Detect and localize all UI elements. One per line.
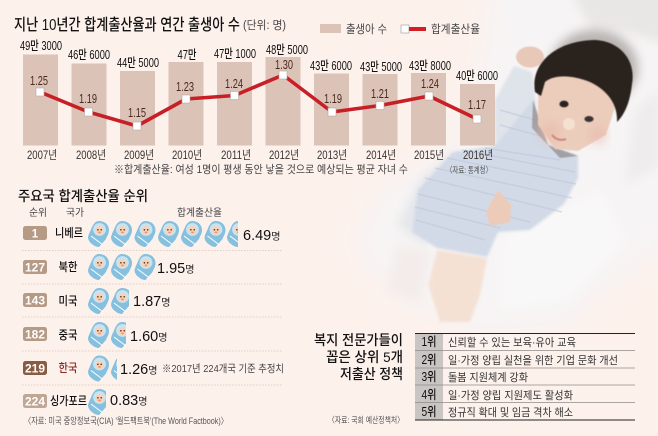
year labels: 2013년 [317, 148, 347, 162]
row: South Korea: 한국 [58, 361, 78, 375]
table: top five policies: 돌봄 지원체계 강화 [448, 371, 528, 384]
bar chart: births and total fertility rate [20, 39, 498, 162]
source: National Assembly Budget Office: 〈자료: 국회 예산정책처〉 [328, 415, 404, 425]
table: top five policies: 3위 [422, 370, 436, 384]
row: North Korea: 127 [25, 262, 45, 274]
hair [534, 40, 633, 122]
heading: top five policies [314, 332, 403, 382]
photo: baby lying on white bedding [350, 0, 658, 335]
legs [428, 250, 487, 322]
birth count labels: 49만 3000 [20, 39, 62, 53]
row: South Korea [23, 356, 284, 382]
row: USA: 미국 [58, 294, 78, 308]
year labels: 2016년 [463, 148, 493, 162]
heading: top five policies: 꼽은 상위 5개 [326, 349, 403, 365]
rate labels: 1.19 [324, 92, 342, 106]
rate labels: 1.19 [79, 92, 97, 106]
row: South Korea: ※2017년 224개국 기준 추정치 [162, 363, 284, 375]
row: Singapore [23, 389, 147, 415]
lower hand [486, 190, 511, 226]
rank labels: 1위 [422, 335, 436, 349]
eyes [559, 101, 569, 107]
row: Singapore: 0.83명 [110, 393, 147, 409]
birth count labels: 43만 8000 [409, 59, 451, 73]
rate labels: 1.21 [371, 87, 389, 101]
birth count labels: 40만 6000 [456, 69, 498, 83]
birth count labels: 47만 [178, 48, 197, 62]
row: North Korea: 북한 [58, 260, 78, 274]
legend: 합계출산율 [431, 23, 480, 36]
year labels: 2010년 [172, 148, 202, 162]
bars [23, 54, 495, 146]
year labels: 2009년 [124, 148, 154, 162]
bodysuit [412, 100, 578, 257]
rate labels: 1.24 [421, 77, 439, 91]
raised arm [495, 66, 536, 150]
rate labels: 1.15 [128, 106, 146, 120]
rate labels: 1.25 [30, 74, 48, 88]
row: Niger: 니베르 [55, 226, 83, 240]
row: China: 1.60명 [130, 329, 167, 345]
unit note: (단위: 명) [243, 19, 286, 32]
year labels [27, 148, 493, 162]
table: top five policies: 일·가정 양립 지원제도 활성화 [448, 388, 573, 402]
birth count labels: 43만 6000 [310, 59, 352, 73]
row: China: 중국 [58, 328, 78, 342]
birth count labels: 46만 6000 [68, 48, 110, 62]
heading: top five policies: 저출산 정책 [340, 366, 403, 382]
row: Singapore: 싱가포르 [50, 394, 87, 408]
legend: 출생아 수 [346, 23, 387, 36]
year labels: 2012년 [269, 148, 299, 162]
footnote: definition: ※합계출산율: 여성 1명이 평생 동안 낳을 것으로 예상되는 평균 자녀 수 [114, 163, 408, 176]
source: CIA World Factbook: 〈자료: 미국 중앙정보국(CIA) '월드팩트북'(The World Factbook)〉 [24, 415, 228, 426]
face [538, 70, 618, 151]
markers [36, 71, 481, 130]
rate labels [30, 58, 486, 120]
ranking column headers: 국가 [66, 207, 84, 219]
source: statistics: 〈자료: 통계청〉 [446, 165, 492, 175]
rate labels: 1.23 [176, 80, 194, 94]
row: Niger: 1 [32, 228, 39, 240]
nose and mouth [563, 118, 575, 130]
ranking column headers: 합계출산율 [177, 207, 222, 219]
table: top five policies: 2위 [422, 353, 436, 367]
shadow around the head [550, 30, 638, 106]
year labels: 2008년 [76, 148, 106, 162]
table: top five policies: 정규직 확대 및 임금 격차 해소 [448, 405, 573, 419]
year labels: 2007년 [27, 148, 57, 162]
row: Niger: 6.49명 [243, 228, 280, 244]
table: top five policies: 4위 [422, 388, 436, 402]
year labels: 2014년 [366, 148, 396, 162]
birth count labels: 44만 5000 [117, 56, 159, 70]
table: top five policies [415, 333, 635, 420]
fertility rate line [40, 75, 477, 126]
policies: 신뢰할 수 있는 보육·유아 교육 [448, 336, 576, 349]
raised hand [516, 46, 544, 68]
row: USA [23, 288, 170, 314]
birth count labels: 48만 5000 [266, 43, 308, 57]
rate labels: 1.17 [468, 98, 486, 112]
row: North Korea [23, 254, 194, 280]
table: top five policies: 일·가정 양립 실천을 위한 기업 문화 개선 [448, 353, 618, 367]
birth count labels: 47만 1000 [214, 47, 256, 61]
ranking rows [23, 221, 284, 415]
legend [320, 23, 480, 36]
rate labels: 1.30 [275, 58, 293, 72]
ranking column headers [29, 206, 222, 219]
birth count labels [20, 39, 498, 83]
section heading: ranking: 주요국 합계출산율 순위 [18, 188, 148, 204]
row: USA: 143 [25, 296, 45, 308]
bedding [350, 0, 658, 335]
birth count labels: 43만 5000 [360, 60, 402, 74]
row: North Korea: 1.95명 [157, 261, 194, 277]
neck shadow [532, 100, 578, 158]
row: South Korea: 219 [25, 364, 45, 376]
left fade of the bodysuit [398, 150, 470, 245]
title: 지난 10년간 합계출산율과 연간 출생아 수 [14, 16, 240, 34]
table: top five policies: 5위 [422, 405, 436, 419]
year labels: 2015년 [414, 148, 444, 162]
year labels: 2011년 [221, 148, 251, 162]
rate labels: 1.24 [225, 77, 243, 91]
row: South Korea: 1.26명 [120, 362, 157, 378]
ranking column headers: 순위 [29, 206, 47, 219]
row: USA: 1.87명 [133, 294, 170, 310]
row: China: 182 [25, 330, 45, 342]
heading: top five policies: 복지 전문가들이 [314, 332, 403, 348]
row: Singapore: 224 [25, 396, 46, 408]
row: Niger [23, 221, 280, 247]
row: China [23, 322, 167, 348]
